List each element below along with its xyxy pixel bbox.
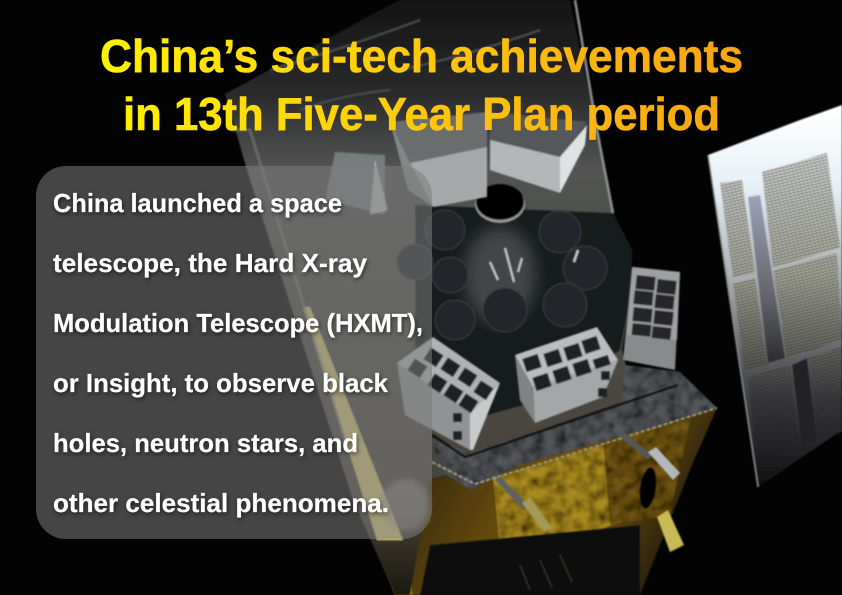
gold satellite body <box>373 408 717 595</box>
collimator box, left <box>397 337 500 450</box>
panel body text: Modulation Telescope (HXMT), <box>53 308 423 338</box>
central hole <box>475 184 525 223</box>
panel body text: or Insight, to observe black <box>53 368 389 398</box>
panel body text: telescope, the Hard X-ray <box>53 248 368 278</box>
collimator boxes, upper row <box>325 112 587 215</box>
foil covered main panel <box>225 0 640 595</box>
solar panel <box>708 105 842 487</box>
optical telescope circles <box>397 210 607 340</box>
panel body text: other celestial phenomena. <box>53 488 389 518</box>
collimator box, right <box>623 267 680 370</box>
base plate and struts <box>432 365 717 552</box>
title: in 13th Five-Year Plan period <box>123 88 720 140</box>
collimator box, centre <box>515 327 618 423</box>
title: China’s sci-tech achievements <box>100 30 743 82</box>
translucent text panel <box>36 166 432 539</box>
panel body text: China launched a space <box>53 188 342 218</box>
panel body text: holes, neutron stars, and <box>53 428 358 458</box>
